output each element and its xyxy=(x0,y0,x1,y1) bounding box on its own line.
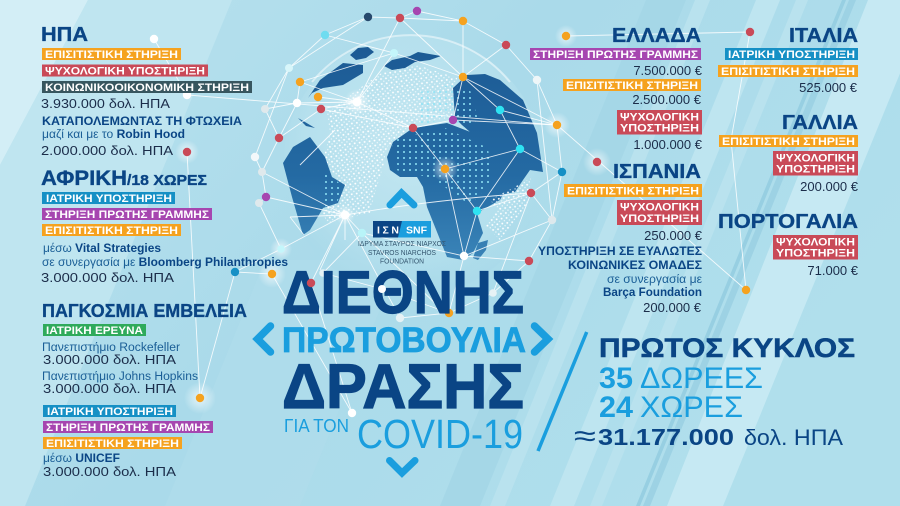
panel: Spain xyxy=(538,161,703,315)
heading: global reach: ΠΑΓΚΟΣΜΙΑ ΕΜΒΕΛΕΙΑ xyxy=(42,300,247,321)
network nodes over title xyxy=(307,279,386,293)
partner name: Barça Foundation xyxy=(603,287,702,299)
tag: food support: ΕΠΙΣΙΤΙΣΤΙΚΗ ΣΤΗΡΙΞΗ xyxy=(566,80,698,92)
logo: SNF: SNF xyxy=(406,224,428,236)
panel: France xyxy=(719,112,859,194)
amount: 200.000 € xyxy=(800,179,859,194)
partner note: σε συνεργασία με Bloomberg Philanthropies xyxy=(42,257,288,269)
heading: USA: ΗΠΑ xyxy=(41,24,88,46)
heading: Africa: ΑΦΡΙΚΗ xyxy=(41,166,127,190)
heading: Greece: ΕΛΛΑΔΑ xyxy=(612,25,701,47)
amount: 7.500.000 € xyxy=(633,63,703,78)
title line: ΠΡΩΤΟΒΟΥΛΙΑ: ΠΡΩΤΟΒΟΥΛΙΑ xyxy=(282,321,526,360)
tag: frontline support: ΣΤΗΡΙΞΗ ΠΡΩΤΗΣ ΓΡΑΜΜΗΣ xyxy=(533,49,698,61)
title: international action initiative for COVID-19 xyxy=(258,259,548,473)
logo: SNF: STAVROS NIARCHOS xyxy=(368,248,436,257)
network node glows xyxy=(175,25,611,414)
amount: 525.000 € xyxy=(799,80,858,95)
partner note: σε συνεργασία με xyxy=(607,274,702,286)
panel: Portugal xyxy=(718,211,859,278)
tag: psychological support xyxy=(617,110,702,134)
subheading: vulnerable groups: ΥΠΟΣΤΗΡΙΞΗ ΣΕ ΕΥΑΛΩΤΕΣ xyxy=(538,246,702,258)
title line: ΔΡΑΣΗΣ: ΔΡΑΣΗΣ xyxy=(282,352,524,422)
network lines xyxy=(154,11,750,413)
icon: chevron left xyxy=(258,326,270,352)
stat: 24 countries: ΧΩΡΕΣ xyxy=(640,391,743,424)
tag: medical support: ΙΑΤΡΙΚΗ ΥΠΟΣΤΗΡΙΞΗ xyxy=(46,193,172,205)
logo: SNF: ΙΔΡΥΜΑ ΣΤΑΥΡΟΣ ΝΙΑΡΧΟΣ xyxy=(358,239,446,248)
amount: 2.000.000 δολ. ΗΠΑ xyxy=(41,143,173,158)
amount: 3.000.000 δολ. ΗΠΑ xyxy=(43,381,176,396)
heading: France: ΓΑΛΛΙΑ xyxy=(782,112,858,134)
partner note: μέσω UNICEF xyxy=(43,453,120,465)
tag: food support: ΕΠΙΣΙΤΙΣΤΙΚΗ ΣΤΗΡΙΞΗ xyxy=(567,186,699,198)
icon: chevron up xyxy=(390,193,414,205)
tag: psychological support: ΨΥΧΟΛΟΓΙΚΗ xyxy=(776,152,855,164)
icon: chevron down xyxy=(390,460,415,473)
panel: Africa xyxy=(41,166,288,285)
title line: ΔΙΕΘΝΗΣ: ΔΙΕΘΝΗΣ xyxy=(282,259,524,326)
continents xyxy=(283,47,543,260)
recipient: Πανεπιστήμιο Johns Hopkins xyxy=(42,371,198,383)
stat: total amount xyxy=(574,420,843,453)
amount: 3.000.000 δολ. ΗΠΑ xyxy=(41,270,174,285)
tag: psychological support: ΥΠΟΣΤΗΡΙΞΗ xyxy=(776,248,855,260)
heading: Spain: ΙΣΠΑΝΙΑ xyxy=(613,161,701,183)
panel: global reach xyxy=(42,300,247,479)
tag: psychological support: ΨΥΧΟΛΟΓΙΚΗ xyxy=(776,236,855,248)
amount: 71.000 € xyxy=(807,263,859,278)
heading suffix: 18 countries: /18 ΧΩΡΕΣ xyxy=(127,172,207,189)
tag: food support: ΕΠΙΣΙΤΙΣΤΙΚΗ ΣΤΗΡΙΞΗ xyxy=(721,66,855,78)
stat: 24 countries: 24 xyxy=(599,391,633,424)
amount: 3.930.000 δολ. ΗΠΑ xyxy=(41,96,170,111)
tag: food support: ΕΠΙΣΙΤΙΣΤΙΚΗ ΣΤΗΡΙΞΗ xyxy=(722,136,855,148)
panel: USA xyxy=(41,24,252,158)
heading: Portugal: ΠΟΡΤΟΓΑΛΙΑ xyxy=(718,211,858,233)
amount: 2.500.000 € xyxy=(632,92,702,107)
subheading line two: ΚΟΙΝΩΝΙΚΕΣ ΟΜΑΔΕΣ xyxy=(568,260,702,272)
partner note: μαζί και με το Robin Hood xyxy=(42,129,185,141)
tag: socioeconomic support: ΚΟΙΝΩΝΙΚΟΟΙΚΟΝΟΜΙΚΗ ΣΤΗΡΙΞΗ xyxy=(45,82,249,94)
amount: 200.000 € xyxy=(643,300,702,315)
partner note: μέσω Vital Strategies xyxy=(43,243,161,255)
tag: psychological support xyxy=(773,151,858,176)
tag: medical research: ΙΑΤΡΙΚΗ ΕΡΕΥΝΑ xyxy=(46,325,143,337)
recipient: Πανεπιστήμιο Rockefeller xyxy=(42,342,180,354)
title line: COVID-19: COVID-19 xyxy=(357,411,523,457)
heading: first round: ΠΡΩΤΟΣ ΚΥΚΛΟΣ xyxy=(599,333,855,363)
tag: food support: ΕΠΙΣΙΤΙΣΤΙΚΗ ΣΤΗΡΙΞΗ xyxy=(45,49,178,61)
network nodes xyxy=(150,7,754,417)
tag: psychological support xyxy=(773,235,858,260)
tag: psychological support: ΨΥΧΟΛΟΓΙΚΗ ΥΠΟΣΤΗΡΙΞΗ xyxy=(45,66,205,78)
divider slash xyxy=(538,332,587,451)
tag: medical support: ΙΑΤΡΙΚΗ ΥΠΟΣΤΗΡΙΞΗ xyxy=(728,49,855,61)
tag: frontline support: ΣΤΗΡΙΞΗ ΠΡΩΤΗΣ ΓΡΑΜΜΗΣ xyxy=(46,422,210,434)
tag: frontline support: ΣΤΗΡΙΞΗ ΠΡΩΤΗΣ ΓΡΑΜΜΗΣ xyxy=(45,209,209,221)
panel: first round totals xyxy=(574,333,855,453)
tag: food support: ΕΠΙΣΙΤΙΣΤΙΚΗ ΣΤΗΡΙΞΗ xyxy=(45,225,178,237)
heading: Italy: ΙΤΑΛΙΑ xyxy=(789,25,858,47)
amount: 3.000.000 δολ. ΗΠΑ xyxy=(43,464,176,479)
tag: psychological support: ΨΥΧΟΛΟΓΙΚΗ xyxy=(620,202,699,214)
amount: 3.000.000 δολ. ΗΠΑ xyxy=(43,352,176,367)
tag: psychological support: ΥΠΟΣΤΗΡΙΞΗ xyxy=(620,213,699,225)
stat: total amount: ≈ xyxy=(574,420,596,453)
amount: 1.000.000 € xyxy=(633,137,703,152)
title line: for the: ΓΙΑ ΤΟΝ xyxy=(284,416,349,436)
stat: total amount: δολ. ΗΠΑ xyxy=(744,425,843,450)
globe xyxy=(283,35,543,296)
tag: food support: ΕΠΙΣΙΤΙΣΤΙΚΗ ΣΤΗΡΙΞΗ xyxy=(46,438,179,450)
panel: Greece xyxy=(530,25,703,152)
dotted land xyxy=(323,85,492,207)
tag: medical support: ΙΑΤΡΙΚΗ ΥΠΟΣΤΗΡΙΞΗ xyxy=(47,406,173,418)
subheading: fighting poverty: ΚΑΤΑΠΟΛΕΜΩΝΤΑΣ ΤΗ ΦΤΩΧΕΙΑ xyxy=(42,116,242,128)
stat: 35 donations: ΔΩΡΕΕΣ xyxy=(640,362,763,395)
tag: psychological support xyxy=(617,200,702,225)
stat: 35 donations: 35 xyxy=(599,362,633,395)
logo: SNF: FOUNDATION xyxy=(380,256,424,266)
logo: SNF xyxy=(358,221,446,266)
stat: total amount: 31.177.000 xyxy=(598,424,734,450)
tag: psychological support: ΥΠΟΣΤΗΡΙΞΗ xyxy=(776,164,855,176)
amount: 250.000 € xyxy=(644,228,703,243)
logo: SNF: ΙΣΝ xyxy=(377,224,399,236)
tag: psychological support: ΥΠΟΣΤΗΡΙΞΗ xyxy=(620,122,699,134)
panel: Italy xyxy=(718,25,858,95)
icon: chevron right xyxy=(534,326,548,352)
dotted ocean xyxy=(323,65,457,223)
tag: psychological support: ΨΥΧΟΛΟΓΙΚΗ xyxy=(620,112,699,124)
